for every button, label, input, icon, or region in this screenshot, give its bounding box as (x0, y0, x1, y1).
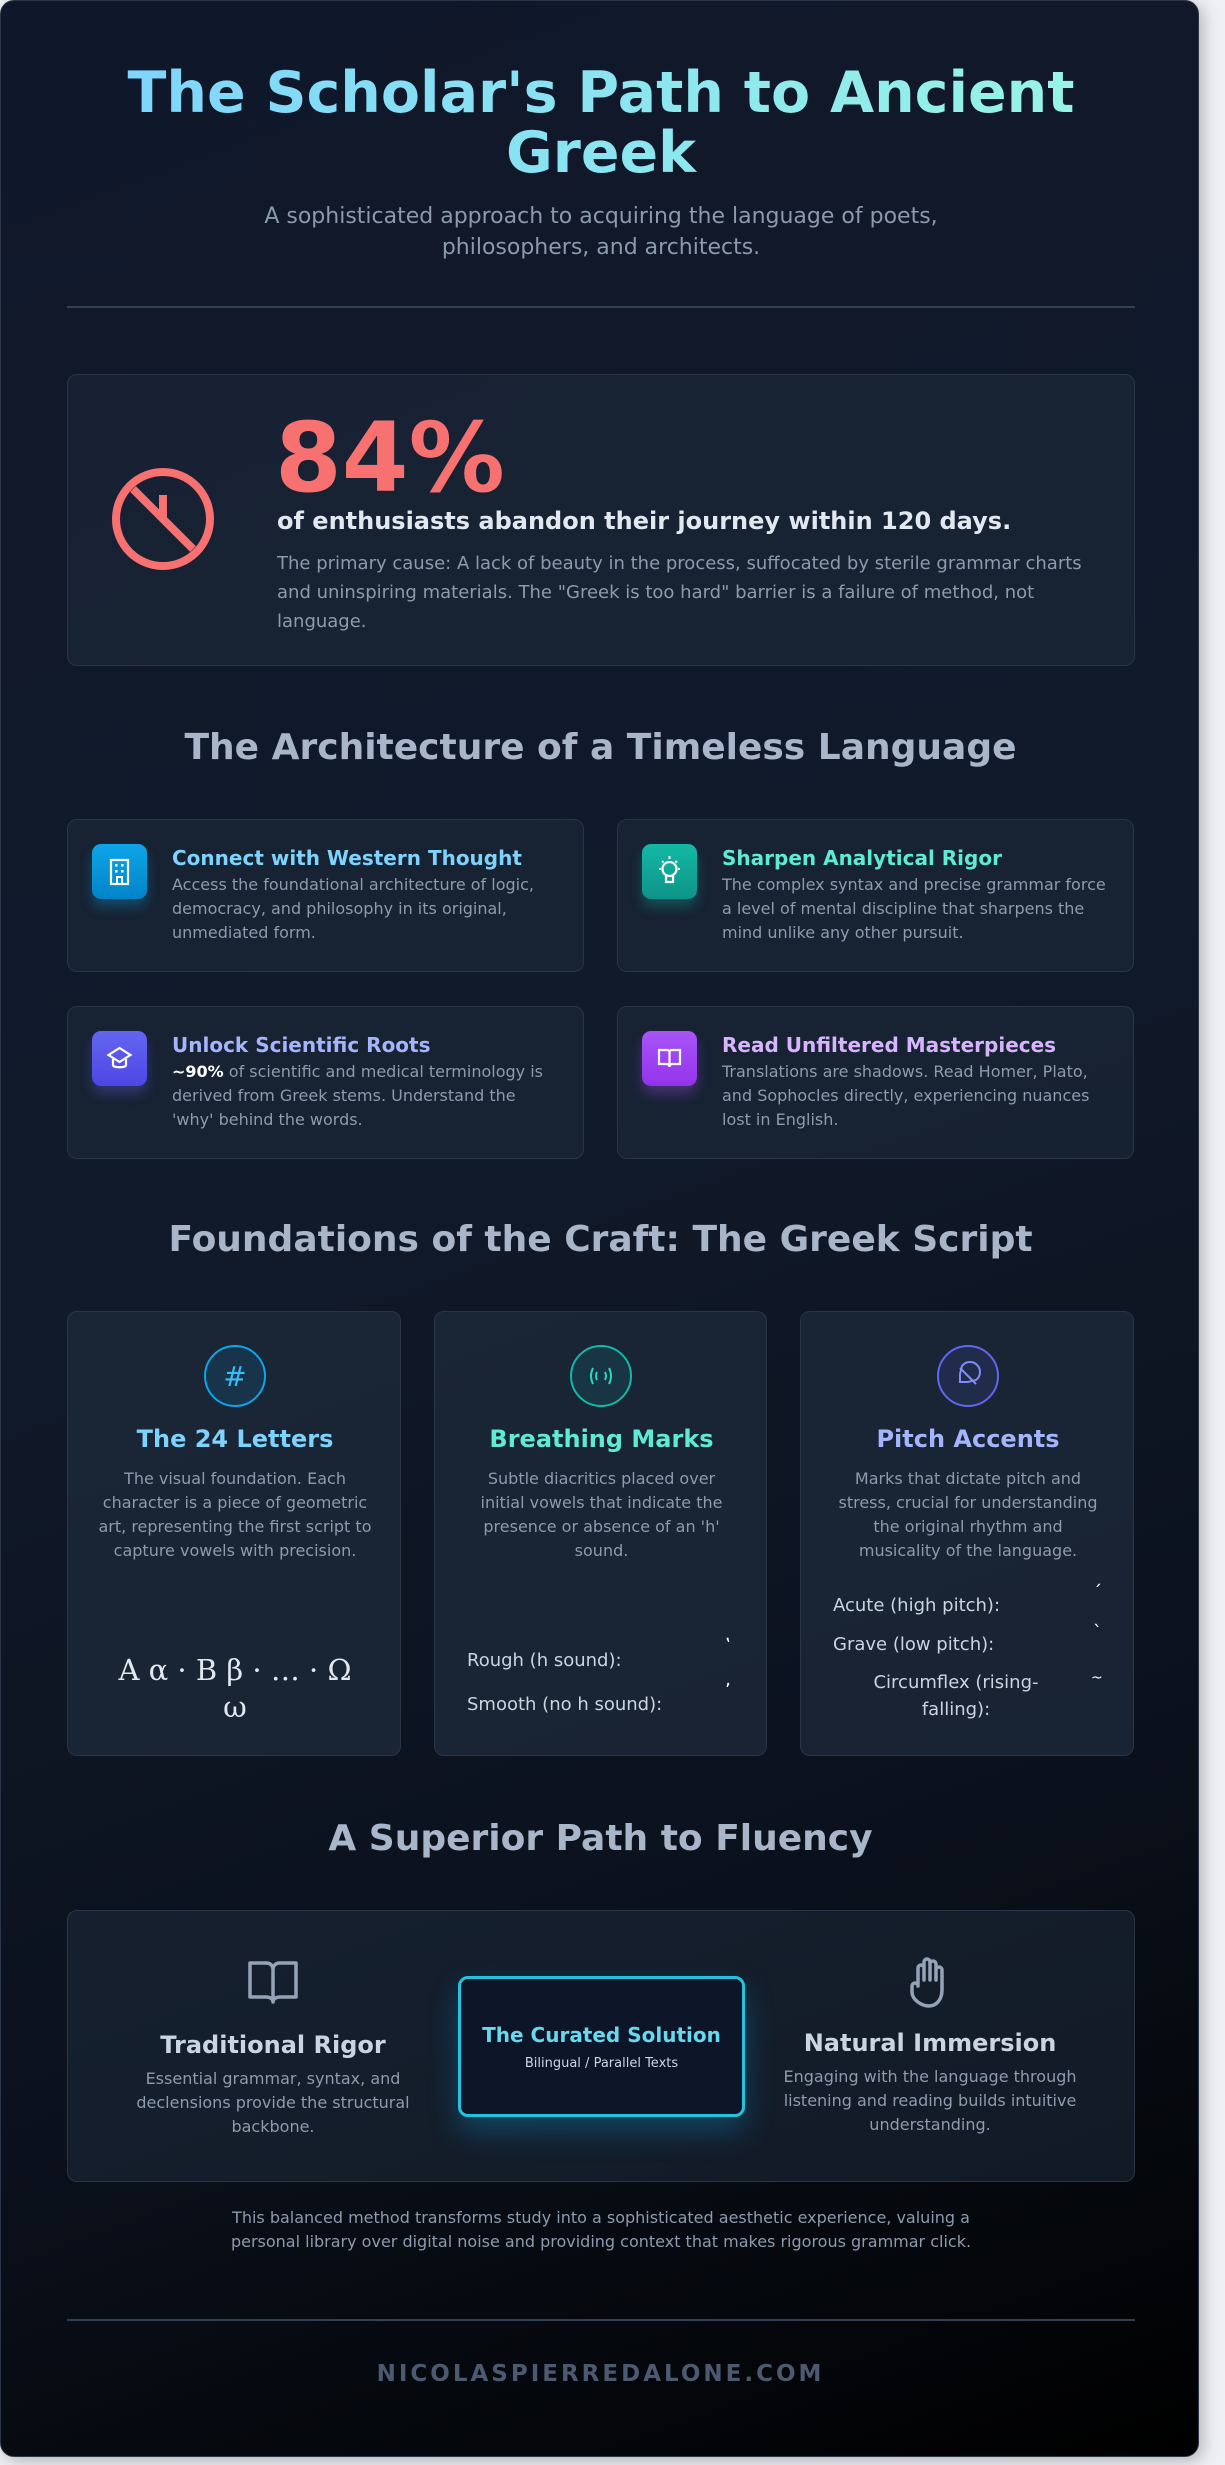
icon: accent (937, 1345, 999, 1407)
text: ~90% of scientific and medical terminology is derived from Greek stems. Understand the (172, 1062, 543, 1105)
text: Unlock Scientific Roots (172, 1033, 431, 1057)
panel: fluency (67, 1910, 1135, 2182)
icon: hash (204, 1345, 266, 1407)
icon: graduation cap (92, 1031, 147, 1086)
panel: pitch accents: ` (1093, 1622, 1102, 1643)
panel: western thought (67, 819, 584, 972)
text: Connect with Western Thought (172, 846, 522, 870)
description: Subtle diacritics placed over initial vowels that indicate the presence or absence of an 'h' sound. (481, 1469, 722, 1560)
text: Translations are shadows. Read Homer, Plato, and Sophocles directly, experiencing nuances lost in English. (722, 1062, 1089, 1129)
smooth row: Smooth (no h sound): (467, 1694, 662, 1715)
center box: curated solution: The Curated Solution (482, 2023, 721, 2047)
acute row: Acute (high pitch): (833, 1595, 1000, 1616)
panel: analytical rigor (617, 819, 1134, 972)
icon: book (642, 1031, 697, 1086)
right column: natural immersion (783, 1957, 1076, 2134)
panel: masterpieces (617, 1006, 1134, 1159)
greek letters: ω (223, 1690, 247, 1724)
title: Breathing Marks (489, 1425, 714, 1453)
left column: traditional rigor (136, 1961, 410, 2136)
footer: NICOLASPIERREDALONE.COM (377, 2361, 824, 2387)
text (722, 1033, 1089, 1129)
rough row: Rough (h sound): (467, 1650, 622, 1671)
heading: architecture: The Architecture of a Timeless Language (184, 727, 1017, 768)
panel: breathing marks: ʽ (725, 1637, 731, 1658)
panel: pitch accents: ~ (1091, 1670, 1103, 1686)
center box: curated solution (458, 1976, 745, 2117)
description: The visual foundation. Each character is a piece of geometric art, representing the first script to capture vowels with precision. (98, 1469, 371, 1560)
grave row: Grave (low pitch): (833, 1634, 994, 1655)
text (172, 1033, 543, 1129)
panel: pitch accents: ´ (1093, 1582, 1102, 1603)
icon: signal (570, 1345, 632, 1407)
text: Sharpen Analytical Rigor (722, 846, 1002, 870)
left column: traditional rigor: backbone. (231, 2117, 315, 2136)
icon: hand (910, 1957, 944, 2008)
icon: bulb (642, 844, 697, 899)
title: The Scholar's Path to Ancient Greek (127, 60, 1074, 186)
text: Access the foundational architecture of logic, democracy, and philosophy in its original, unmediated form. (172, 875, 534, 942)
icon: open book (248, 1961, 298, 2004)
left column: traditional rigor: Traditional Rigor (160, 2031, 386, 2059)
text (172, 846, 534, 942)
text (722, 846, 1106, 942)
stat number: 84% (275, 402, 505, 514)
panel: breathing marks: ʼ (725, 1680, 731, 1701)
icon: hash: # (223, 1360, 247, 1393)
heading: fluency: A Superior Path to Fluency (328, 1818, 873, 1859)
left column: traditional rigor: declensions provide the structural (136, 2093, 410, 2112)
right column: natural immersion: understanding. (869, 2115, 991, 2134)
icon: building (92, 844, 147, 899)
description: Marks that dictate pitch and stress, crucial for understanding the original rhythm and musicality of the language. (838, 1469, 1098, 1560)
panel: pitch accents (800, 1311, 1134, 1756)
greek letters (118, 1653, 352, 1724)
left column: traditional rigor: Essential grammar, syntax, and (146, 2069, 400, 2088)
panel: stat (67, 374, 1135, 666)
closing paragraph: This balanced method transforms study into a sophisticated aesthetic experience, valuing a personal library over digital noise and providing context that makes rigorous grammar click. (231, 2208, 971, 2251)
panel: breathing marks (434, 1311, 767, 1756)
stat description: The primary cause: A lack of beauty in the process, suffocated by sterile grammar charts and uninspiring materials. The "Greek is too hard" barrier is a failure of method, not language. (277, 553, 1082, 632)
heading: foundations: Foundations of the Craft: The Greek Script (168, 1219, 1033, 1260)
panel: scientific roots (67, 1006, 584, 1159)
greek letters: Α α · Β β · … · Ω (118, 1653, 352, 1687)
panel: 24 letters (67, 1311, 401, 1756)
right column: natural immersion: Natural Immersion (804, 2029, 1056, 2057)
center box: curated solution: Bilingual / Parallel Texts (525, 2056, 678, 2071)
subtitle: A sophisticated approach to acquiring the language of poets, philosophers, and architects. (264, 204, 938, 260)
circumflex row: Circumflex (rising-falling): (873, 1672, 1038, 1720)
text: The complex syntax and precise grammar force a level of mental discipline that sharpens the mind unlike any other pursuit. (722, 875, 1106, 942)
stat headline: of enthusiasts abandon their journey within 120 days. (277, 507, 1011, 535)
title: The 24 Letters (137, 1425, 333, 1453)
title: Pitch Accents (876, 1425, 1060, 1453)
right column: natural immersion: Engaging with the language through (783, 2067, 1076, 2086)
text: 'why' behind the words. (172, 1110, 363, 1129)
text: Read Unfiltered Masterpieces (722, 1033, 1056, 1057)
icon: prohibited (112, 468, 214, 570)
right column: natural immersion: listening and reading builds intuitive (784, 2091, 1076, 2110)
